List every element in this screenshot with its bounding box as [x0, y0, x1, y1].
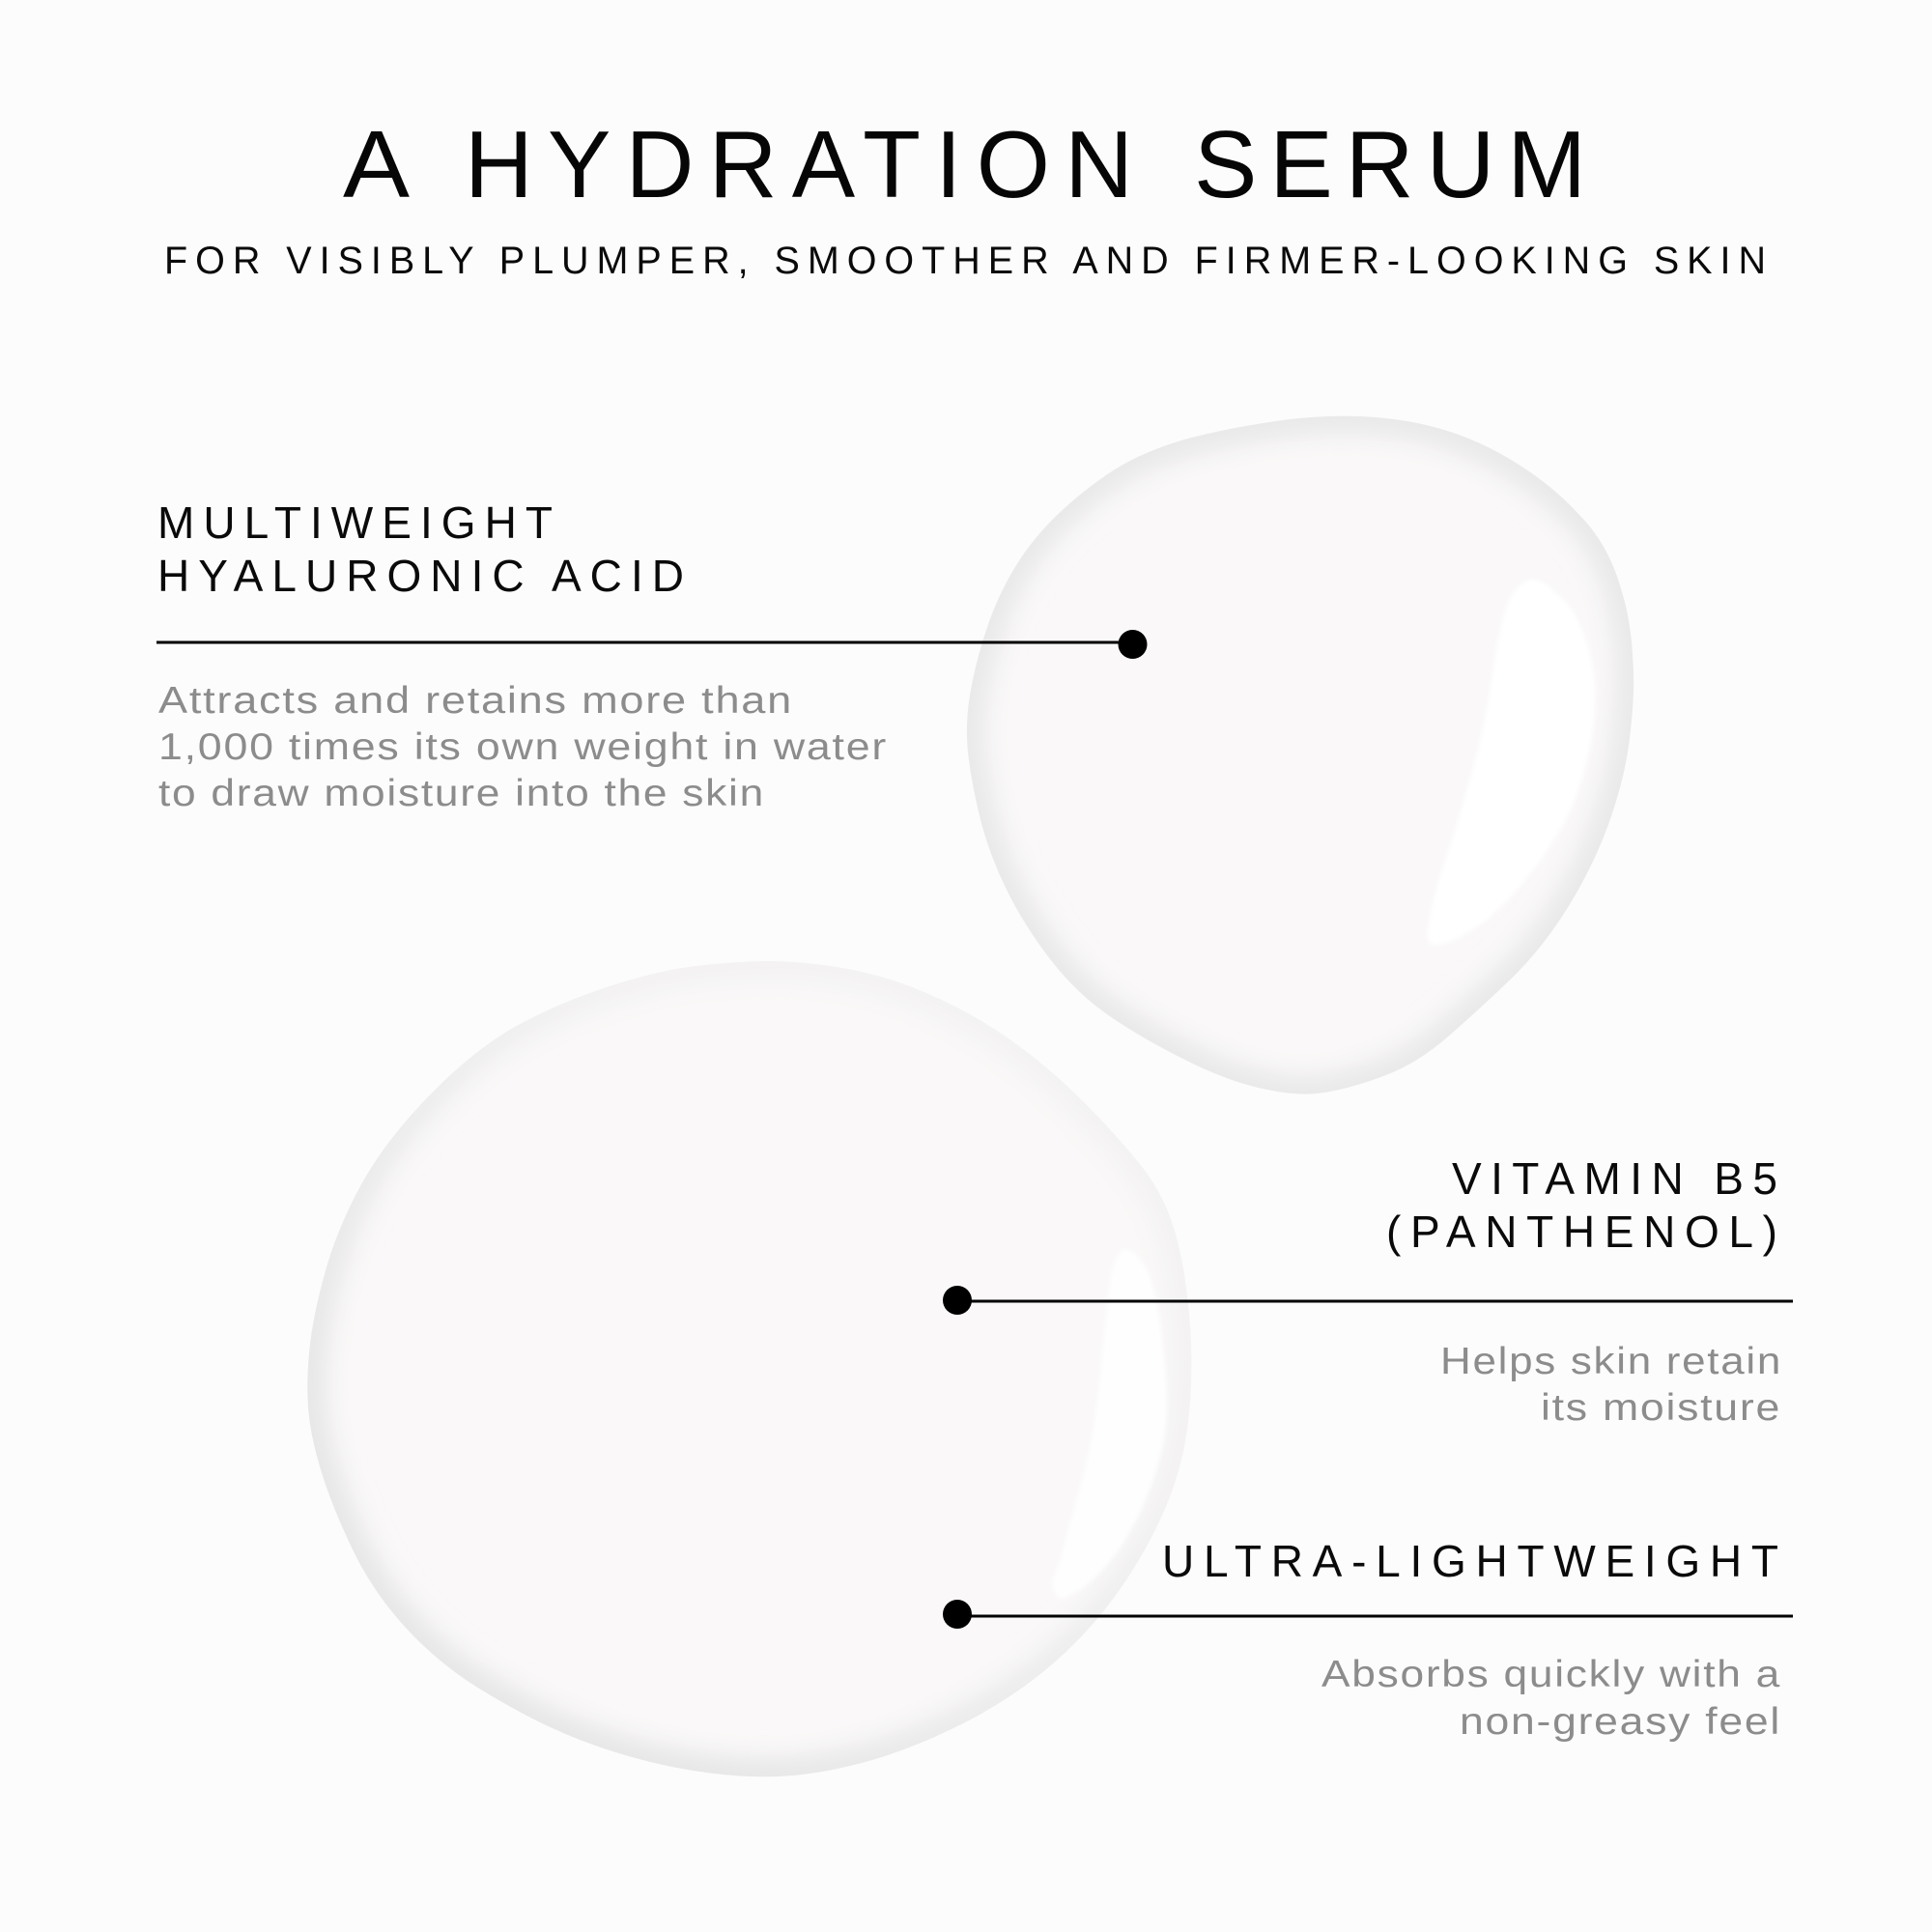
title: SERUM: [1194, 111, 1586, 217]
title: HYDRATION: [465, 111, 1133, 217]
title: A: [343, 111, 411, 217]
callout: vitamin B5: [943, 1153, 1793, 1429]
heading: [1386, 1153, 1777, 1257]
description: [1440, 1341, 1782, 1429]
callout: ultra-lightweight: [943, 1536, 1793, 1743]
serum drop: upper right: [956, 406, 1652, 1111]
subtitle: FOR VISIBLY PLUMPER, SMOOTHER AND FIRMER-LOOKING SKIN: [164, 240, 1766, 282]
description: Absorbs quickly with a: [1321, 1654, 1781, 1695]
heading: (PANTHENOL): [1386, 1207, 1777, 1257]
serum drop: lower left: [290, 947, 1208, 1787]
description: [158, 680, 888, 814]
callout: multiweight hyaluronic acid: [156, 497, 1148, 814]
title: [343, 111, 1586, 217]
description: Attracts and retains more than: [158, 680, 793, 722]
heading: VITAMIN B5: [1452, 1153, 1777, 1204]
heading: MULTIWEIGHT: [157, 497, 553, 548]
heading: ULTRA-LIGHTWEIGHT: [1162, 1536, 1778, 1586]
description: to draw moisture into the skin: [158, 773, 765, 814]
description: its moisture: [1541, 1387, 1781, 1429]
heading: HYALURONIC ACID: [157, 551, 684, 601]
leader line with dot: [156, 630, 1148, 659]
heading: [157, 497, 684, 601]
description: non-greasy feel: [1460, 1701, 1781, 1743]
leader line with dot: [943, 1600, 1793, 1629]
description: [1321, 1654, 1781, 1743]
description: Helps skin retain: [1440, 1341, 1782, 1382]
description: 1,000 times its own weight in water: [158, 726, 888, 768]
leader line with dot: [943, 1286, 1793, 1315]
